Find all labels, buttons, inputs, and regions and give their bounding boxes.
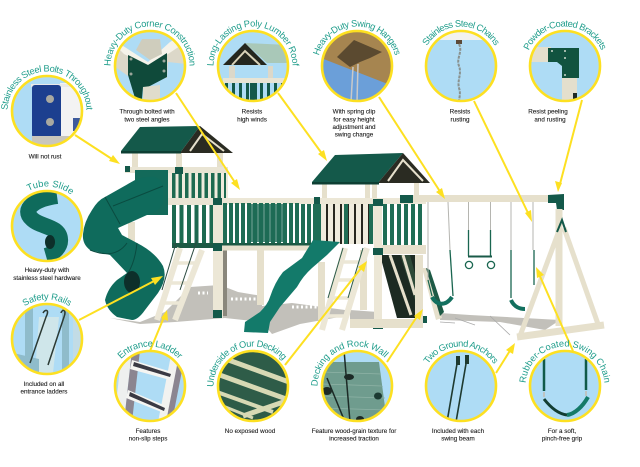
ring [322, 31, 392, 101]
callout: poly lumber roof: high winds [237, 116, 267, 124]
center post [374, 200, 382, 328]
ring [426, 351, 496, 421]
straight slide [244, 240, 340, 333]
shadow fence gaps [198, 293, 317, 307]
lower rail and pickets [168, 198, 228, 205]
caption: Feature wood-grain texture for [312, 428, 396, 435]
arrow: anchors [496, 343, 515, 373]
caption: Resists [242, 108, 262, 116]
callout: decking and rock wall [311, 340, 396, 442]
callout: swing hangers: adjustment and [332, 124, 376, 131]
rock wall [380, 255, 423, 318]
caption: For a soft, [548, 428, 576, 435]
heading: Heavy-Duty Swing Hangers [313, 20, 400, 55]
chains upper [428, 202, 533, 280]
icon: ladder [116, 352, 184, 420]
heading: Safety Rails [22, 293, 71, 306]
tower posts [128, 150, 264, 305]
swings [428, 202, 534, 335]
arrow: entrance ladder [150, 310, 168, 351]
arrow: underside [285, 261, 367, 365]
brackets [314, 195, 427, 329]
callout: powder-coated brackets: and rusting [534, 116, 566, 124]
caption: Features [136, 428, 160, 435]
arrow: hangers [379, 97, 445, 199]
heading: Two Ground Anchors [423, 340, 498, 364]
ring [322, 351, 392, 421]
heading: Long-Lasting Poly Lumber Roof [207, 20, 300, 66]
callout: stainless steel bolts [1, 65, 92, 160]
top rail [125, 167, 228, 173]
heading: Heavy-Duty Corner Construction [104, 22, 195, 66]
callout: ground anchors [423, 340, 498, 442]
arrow: swing chain [536, 267, 573, 351]
icon: bracket [531, 32, 599, 100]
entrance ladder right [322, 248, 367, 330]
callout: swing chain: pinch-free grip [542, 436, 583, 442]
icon: corner bracket [116, 32, 184, 100]
ring [218, 31, 288, 101]
swing beam [413, 194, 604, 337]
roof [121, 126, 200, 153]
icon: roof [219, 32, 287, 100]
icon: swing seat [531, 352, 599, 420]
roof [312, 153, 403, 183]
rings [465, 261, 473, 269]
callout: entrance ladder: non-slip steps [129, 436, 167, 442]
icon: chain [427, 32, 495, 100]
trapeze bar [468, 256, 492, 258]
callout: stainless chains [422, 20, 498, 124]
caption: Included with each [432, 428, 485, 435]
chains lower [428, 230, 534, 298]
ring [12, 191, 82, 261]
bridge [222, 198, 322, 250]
icon: rails [13, 305, 81, 373]
caption: Resist peeling [528, 108, 568, 116]
ring [530, 351, 600, 421]
playset illustration [83, 126, 604, 337]
heading: Stainless Steel Bolts Throughout [1, 65, 92, 110]
caption: Through bolted with [119, 108, 175, 116]
callout: tube slide: stainless steel hardware [13, 275, 81, 282]
callout: poly lumber roof [207, 20, 300, 124]
callout: decking and rock wall: increased traction [329, 436, 379, 442]
caption: No exposed wood [225, 428, 276, 435]
icon: anchors [427, 352, 495, 420]
callout: safety rails: entrance ladders [21, 388, 67, 396]
caption: Included on all [24, 381, 64, 388]
callout: corner construction [104, 22, 195, 124]
ground shadows [110, 285, 560, 334]
green tube panel [135, 170, 168, 215]
icon: slide [13, 192, 81, 260]
icon: decking [219, 352, 287, 420]
heading: Tube Slide [26, 180, 73, 194]
arrow: safety rails [79, 276, 163, 320]
ring [218, 351, 288, 421]
entrance ladder left [157, 240, 202, 320]
arrow: chains [474, 101, 532, 222]
icon: rock wall [323, 352, 391, 420]
callout: swing hangers: for easy height [333, 116, 375, 124]
a-frame [517, 209, 604, 337]
seats [432, 297, 452, 304]
tube slide [83, 177, 165, 320]
heading: Rubber-Coated Swing Chain [519, 340, 610, 382]
posts [318, 183, 423, 320]
ring [12, 76, 82, 146]
heading: Underside of Our Decking [207, 340, 286, 386]
ring [530, 31, 600, 101]
caption: Resists [450, 108, 470, 116]
right tower [300, 153, 444, 329]
upper pickets [168, 173, 228, 198]
tube seams [90, 186, 163, 273]
arrow: decking [387, 309, 423, 362]
callout: safety rails [10, 293, 84, 396]
ring [12, 304, 82, 374]
tube opening [124, 271, 140, 293]
callout: stainless chains: rusting [451, 116, 470, 124]
arrow: brackets [555, 100, 582, 192]
base beam [350, 319, 423, 328]
arrow: bolts [75, 135, 120, 164]
heading: Powder-Coated Brackets [523, 20, 606, 50]
callout: swing hangers: swing change [335, 132, 374, 138]
callout: powder-coated brackets [523, 20, 606, 124]
left tower [121, 126, 264, 318]
callout: swing hangers [313, 20, 400, 138]
callout: corner construction: two steel angles [124, 116, 170, 124]
caption: With spring clip [333, 108, 376, 116]
heading: Decking and Rock Wall [311, 340, 389, 386]
callout: underside of decking [207, 340, 290, 435]
caption: Heavy-duty with [25, 267, 70, 274]
icon: bolted plate [13, 77, 80, 145]
callout: swing chain [519, 340, 610, 442]
arrow: roof [278, 93, 327, 161]
ring [115, 31, 185, 101]
callout: tube slide [10, 180, 84, 282]
heading: Stainless Steel Chains [422, 20, 498, 46]
ring [115, 351, 185, 421]
pickets [316, 204, 374, 244]
callout: ground anchors: swing beam [441, 436, 475, 442]
arrow: corner [176, 93, 240, 190]
icon: hanger [323, 32, 391, 100]
callout: entrance ladder [114, 340, 186, 442]
ring [426, 31, 496, 101]
heading: Entrance Ladder [117, 340, 182, 358]
caption: Will not rust [29, 154, 62, 160]
